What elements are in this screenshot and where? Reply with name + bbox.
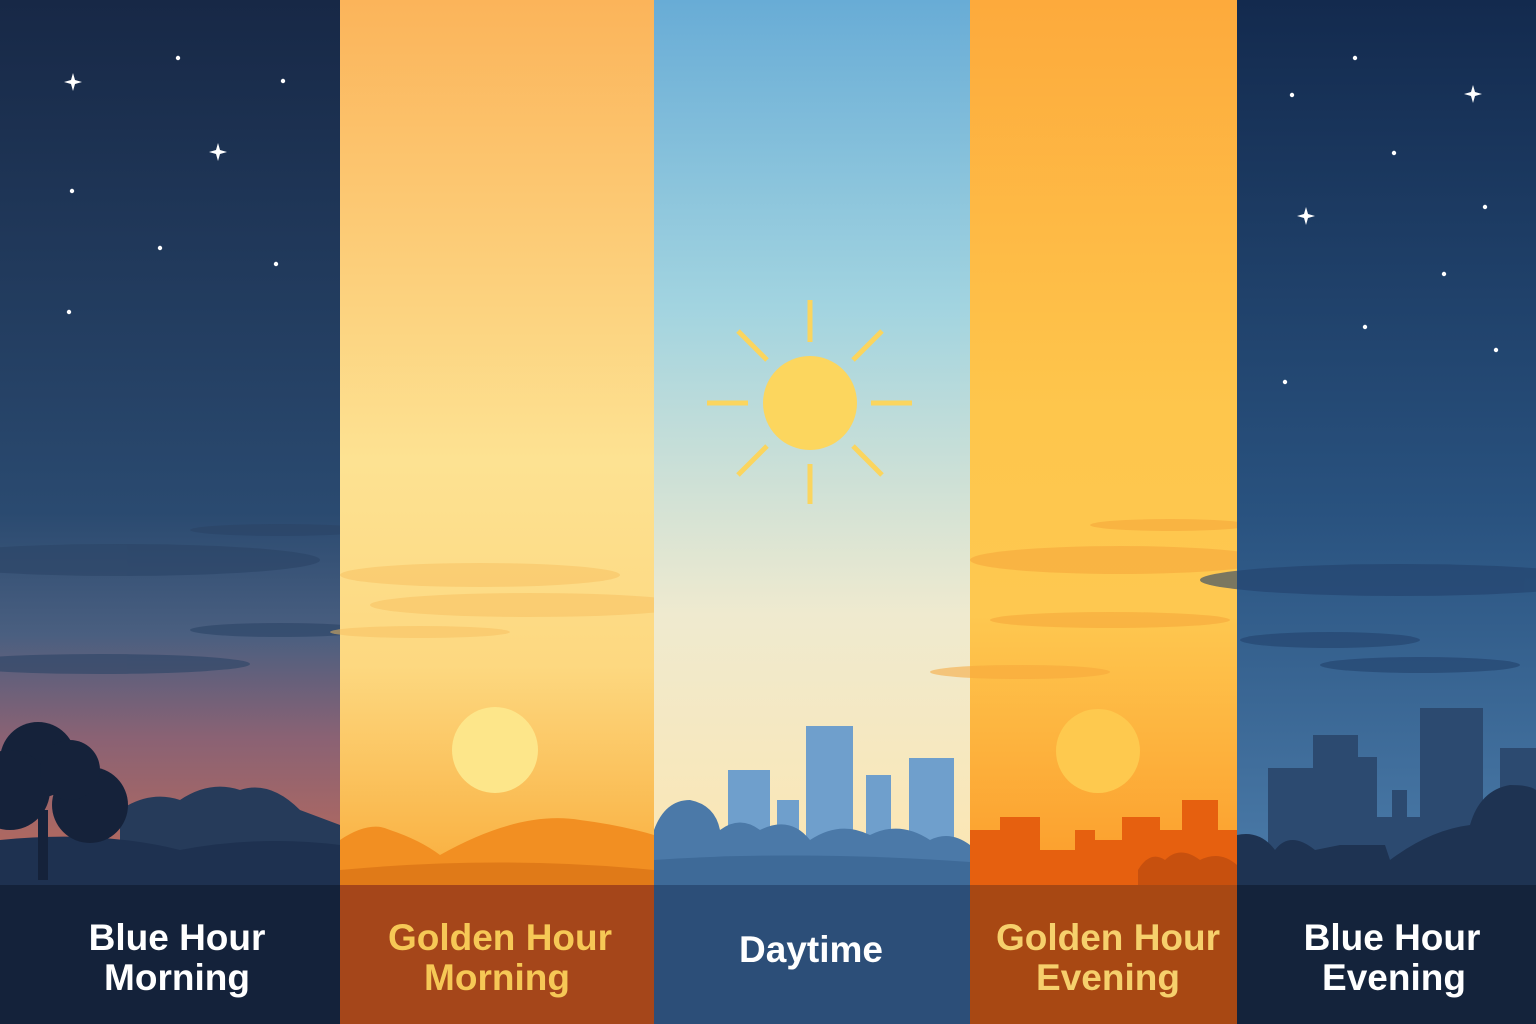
city skyline night bbox=[1237, 708, 1536, 885]
label: golden hour evening: Evening bbox=[1036, 957, 1180, 998]
label: blue hour evening: Blue Hour bbox=[1304, 917, 1480, 958]
stars evening bbox=[1283, 56, 1498, 384]
panel: blue hour morning bbox=[0, 0, 370, 1024]
icon: rising sun bbox=[452, 707, 538, 793]
panel: daytime bbox=[654, 0, 970, 1024]
icon: setting sun bbox=[1056, 709, 1140, 793]
label: blue hour morning: Blue Hour bbox=[89, 917, 265, 958]
clouds bbox=[0, 524, 370, 674]
city skyline day bbox=[654, 726, 970, 885]
landscape silhouette morning bbox=[0, 722, 340, 885]
panel: golden hour evening bbox=[930, 0, 1270, 1024]
city skyline evening bbox=[970, 800, 1237, 885]
label: golden hour morning: Morning bbox=[424, 957, 570, 998]
hills bbox=[340, 818, 654, 885]
panel: golden hour morning bbox=[330, 0, 690, 1024]
stars morning bbox=[64, 56, 285, 314]
panel: blue hour evening bbox=[1200, 0, 1536, 1024]
icon: sun bbox=[707, 300, 912, 504]
label: blue hour evening: Evening bbox=[1322, 957, 1466, 998]
label: daytime: Daytime bbox=[739, 929, 883, 970]
label: golden hour morning: Golden Hour bbox=[388, 917, 612, 958]
label: blue hour morning: Morning bbox=[104, 957, 250, 998]
label: golden hour evening: Golden Hour bbox=[996, 917, 1220, 958]
